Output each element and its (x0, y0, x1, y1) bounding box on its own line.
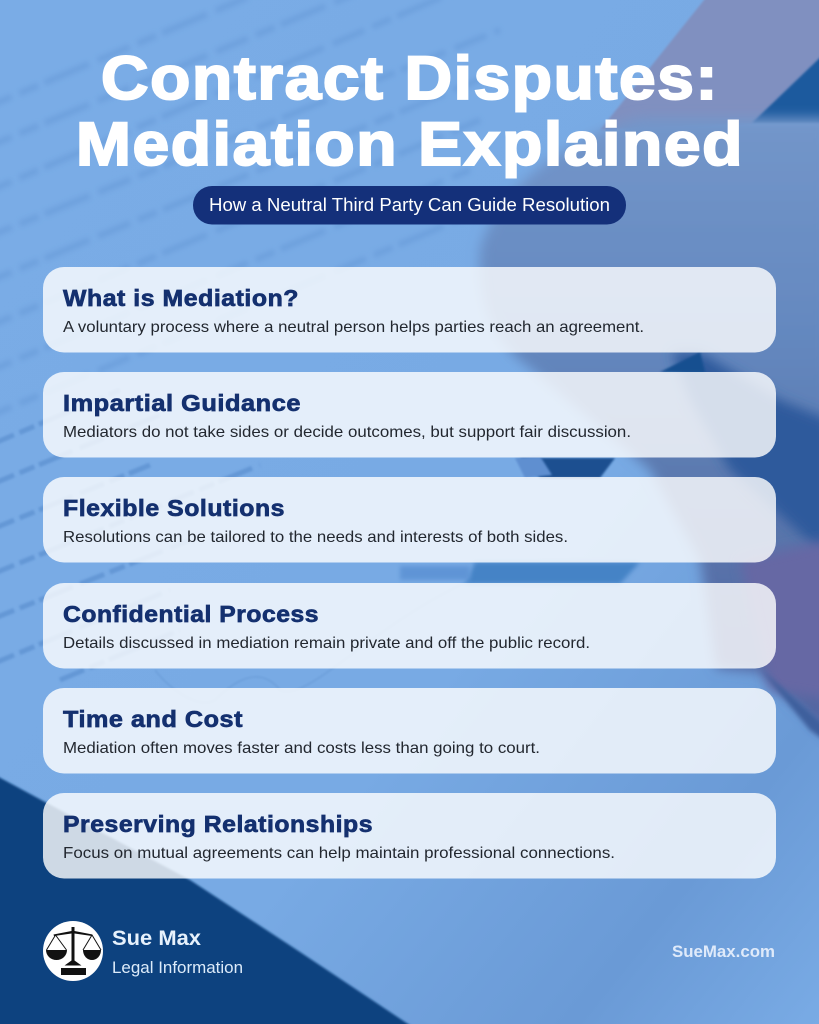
hand and sleeve (600, 0, 819, 130)
subtitle pill (193, 186, 626, 224)
signature strokes (155, 580, 470, 703)
card: confidential process (43, 583, 776, 668)
card: confidential process: Details discussed in mediation remain private and off the public record. (63, 635, 590, 652)
brand tagline: Legal Information (112, 959, 243, 977)
title: Mediation Explained (76, 110, 744, 178)
card: time and cost (43, 688, 776, 774)
card: impartial guidance: Mediators do not take sides or decide outcomes, but support fair discussion. (63, 424, 631, 441)
card: impartial guidance: Impartial Guidance (63, 390, 301, 416)
website: SueMax.com (672, 943, 775, 961)
subtitle pill: How a Neutral Third Party Can Guide Resolution (209, 195, 610, 215)
card: preserving relationships (43, 793, 776, 878)
icon: scales of justice logo (43, 921, 103, 981)
brand name: Sue Max (112, 927, 201, 950)
card: what is mediation (43, 267, 776, 352)
card: time and cost: Time and Cost (63, 706, 243, 732)
dark lower corner (0, 767, 432, 1024)
card: time and cost: Mediation often moves faster and costs less than going to court. (63, 740, 540, 757)
card: preserving relationships: Preserving Relationships (63, 811, 373, 837)
card: what is mediation: A voluntary process where a neutral person helps parties reach an agreement. (63, 319, 644, 336)
card: flexible solutions (43, 477, 776, 562)
title: Contract Disputes: (101, 44, 719, 112)
card: what is mediation: What is Mediation? (63, 285, 299, 311)
card: flexible solutions: Flexible Solutions (63, 495, 285, 521)
card: impartial guidance (43, 372, 776, 458)
card: flexible solutions: Resolutions can be tailored to the needs and interests of both sides. (63, 529, 568, 546)
card: confidential process: Confidential Process (63, 601, 319, 627)
title (76, 44, 744, 178)
card: preserving relationships: Focus on mutual agreements can help maintain professional connections. (63, 845, 615, 862)
